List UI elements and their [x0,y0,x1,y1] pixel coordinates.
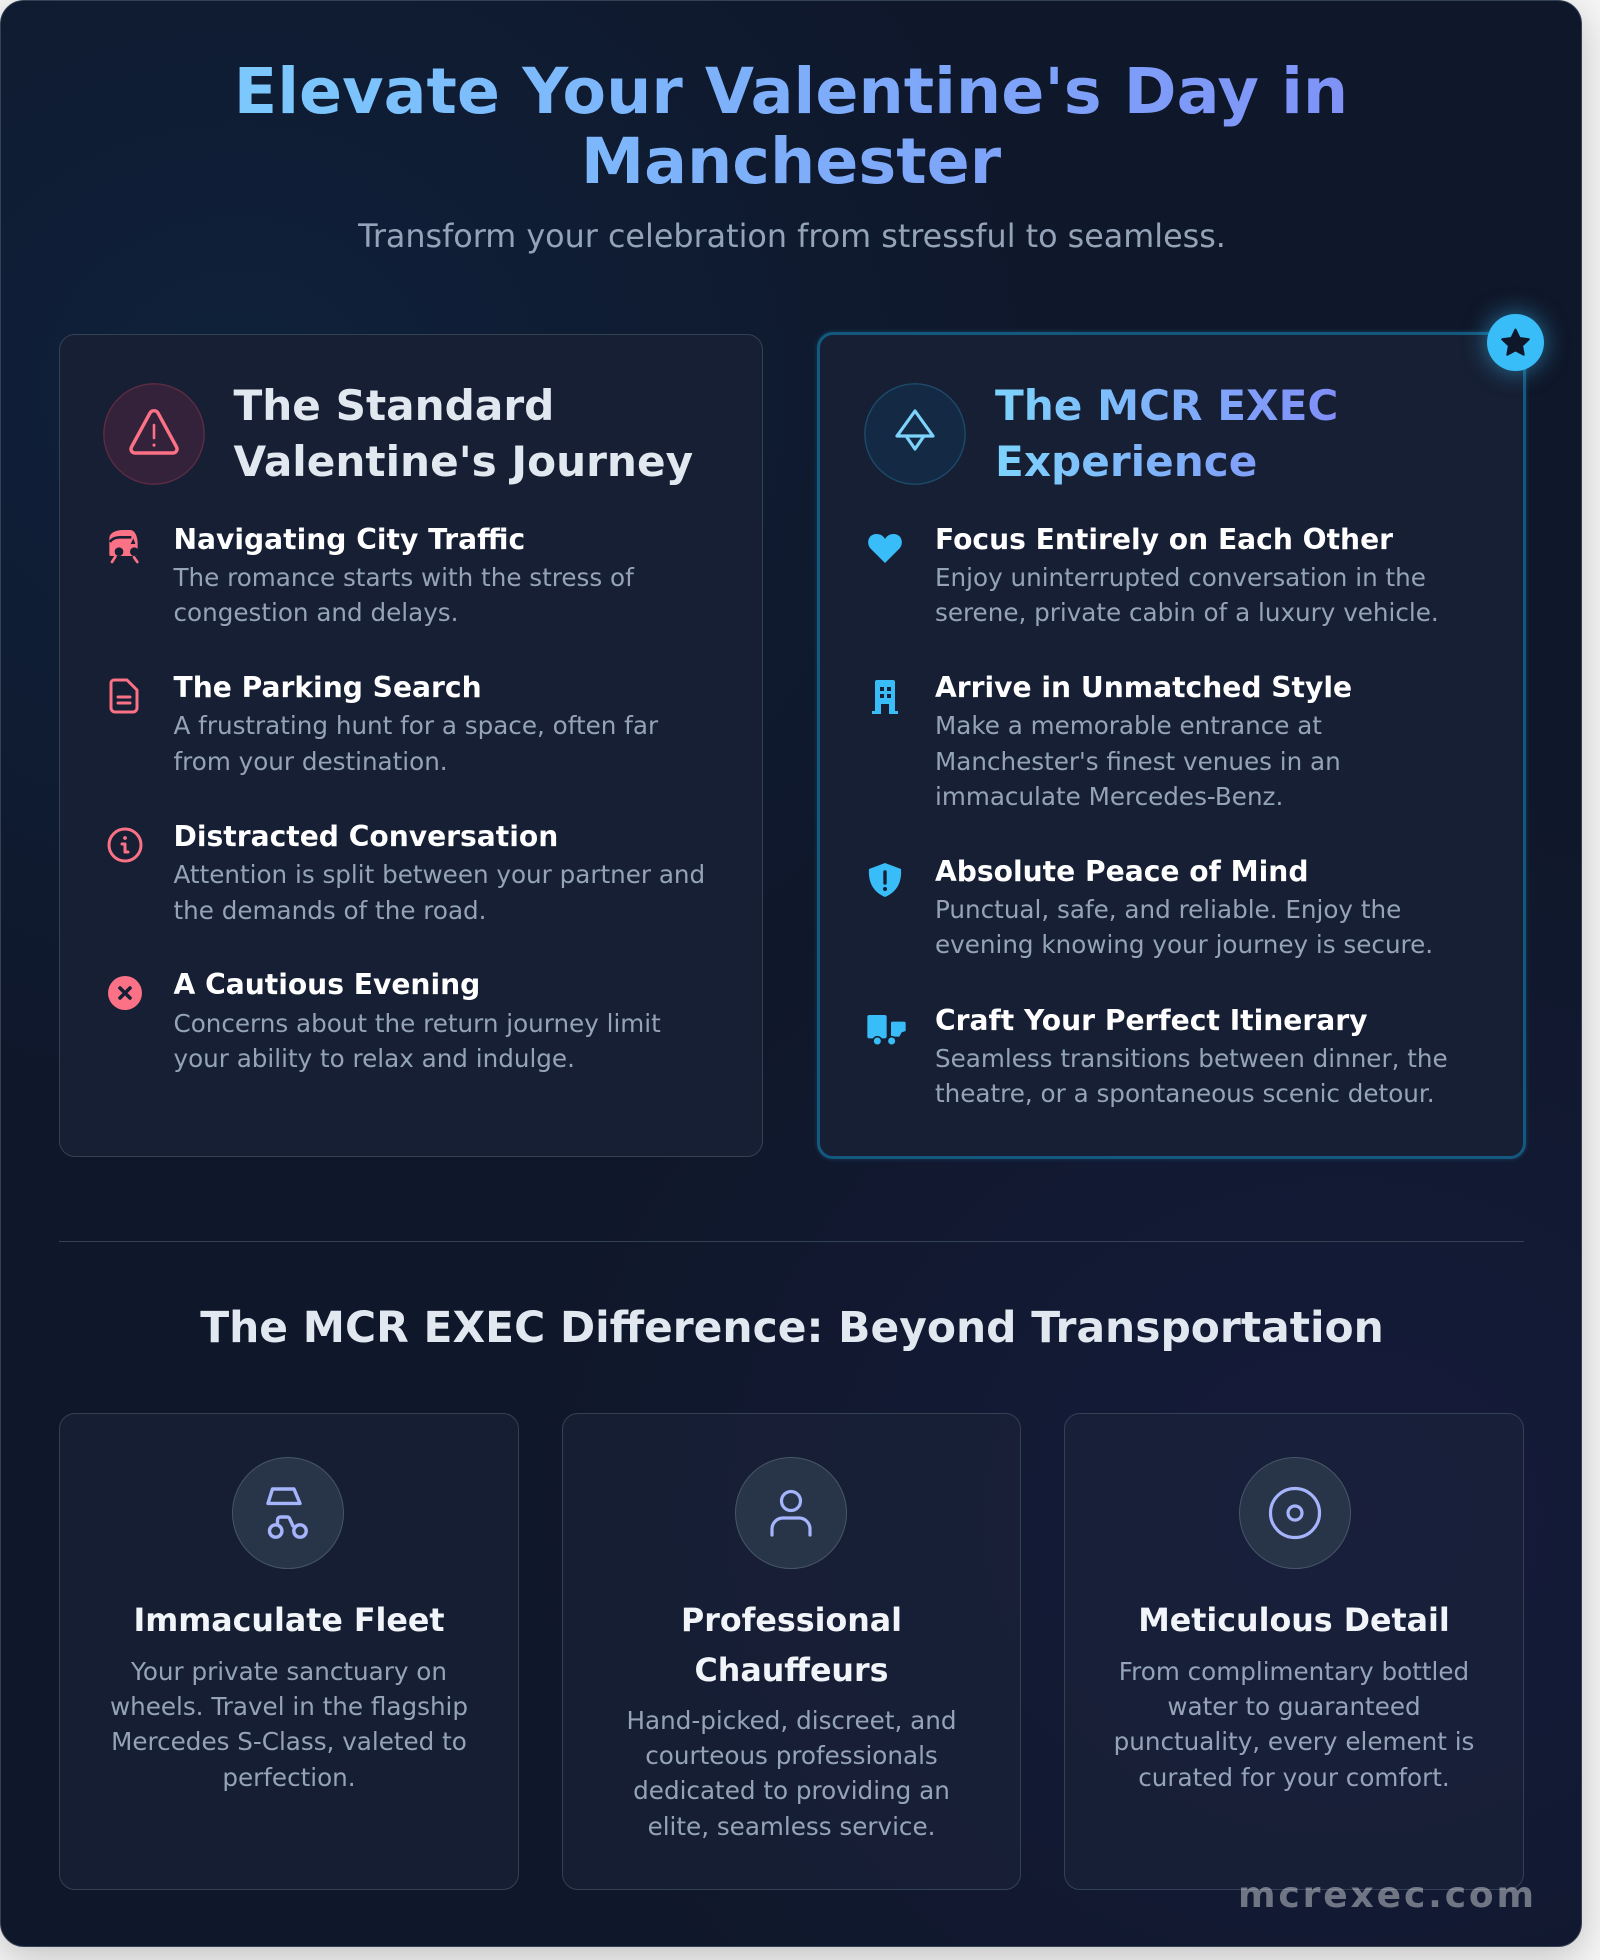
icon: info [108,828,142,862]
icon: building [872,680,898,714]
title [226,56,1356,196]
panel heading: MCR EXEC experience: Experience [995,437,1257,486]
infographic card: The romance starts with the stress of [174,562,634,592]
infographic card: immaculate Mercedes-Benz. [935,782,1283,811]
divider [59,1241,1524,1242]
infographic card: the demands of the road. [174,896,486,925]
icon: diamond [864,383,966,485]
card text: courteous professionals [645,1741,938,1770]
infographic card: Craft Your Perfect Itinerary [935,1004,1367,1037]
item: craft your perfect itinerary [935,1004,1448,1108]
card text [1114,1657,1474,1792]
item: distracted conversation [174,820,705,925]
infographic card: serene, private cabin of a luxury vehicle. [935,598,1439,627]
icon: document [110,678,138,714]
infographic card: Seamless transitions between dinner, the [935,1044,1448,1072]
icon: shield [868,863,902,897]
icon: cross circle [108,976,142,1010]
card text: dedicated to providing an [633,1776,950,1805]
infographic card: evening knowing your journey is secure. [935,930,1433,959]
subtitle: Transform your celebration from stressful to seamless. [358,218,1226,255]
icon: heart [868,534,902,563]
card text: elite, seamless service. [648,1812,935,1841]
panel heading: MCR EXEC experience: The MCR EXEC [995,380,1338,430]
card text: Your private sanctuary on [131,1657,447,1686]
icon: target [1239,1457,1351,1569]
icon: truck [867,1015,906,1044]
item: arrive in unmatched style [935,671,1352,811]
card title: Meticulous Detail [1138,1603,1450,1639]
infographic card: congestion and delays. [174,598,458,627]
card text: wheels. Travel in the flagship [110,1692,468,1721]
card: immaculate fleet [59,1413,519,1890]
icon: star badge [1473,300,1558,385]
card text: punctuality, every element is [1114,1727,1474,1756]
infographic card: Distracted Conversation [174,820,558,852]
card text [110,1657,468,1792]
item: navigating city traffic [173,523,634,627]
infographic card: Concerns about the return journey limit [174,1008,661,1038]
item: a cautious evening [174,968,661,1073]
card title: Chauffeurs [695,1653,888,1689]
item: focus entirely on each other [935,523,1439,627]
panel heading: standard journey: The Standard [234,380,554,430]
infographic card: your ability to relax and indulge. [174,1044,575,1073]
infographic card: Navigating City Traffic [174,523,525,556]
infographic card: theatre, or a spontaneous scenic detour. [935,1079,1435,1108]
infographic card: Make a memorable entrance at [935,711,1322,740]
panel: MCR EXEC experience [817,332,1526,1159]
card title: Immaculate Fleet [133,1603,445,1639]
title: Manchester [581,124,1001,198]
infographic card: Arrive in Unmatched Style [935,671,1352,704]
card text: perfection. [222,1763,356,1792]
panel heading: MCR EXEC experience [995,378,1345,491]
infographic card: Punctual, safe, and reliable. Enjoy the [935,894,1401,924]
infographic card: Focus Entirely on Each Other [935,523,1393,556]
card text: From complimentary bottled [1119,1657,1469,1686]
icon: fleet [232,1457,344,1569]
card text: Hand-picked, discreet, and [627,1706,956,1735]
item: absolute peace of mind [935,855,1433,959]
card title: Professional [681,1603,902,1639]
card title [681,1603,902,1689]
infographic card: from your destination. [174,747,448,776]
watermark: mcrexec.com [1238,1875,1537,1916]
card text [627,1706,956,1841]
icon: car [109,530,139,564]
infographic card: The Parking Search [174,671,482,704]
item: the parking search [174,671,658,776]
title: Elevate Your Valentine's Day in [234,54,1348,128]
card text: water to guaranteed [1167,1692,1421,1721]
card: meticulous detail [1064,1413,1524,1890]
infographic card: A frustrating hunt for a space, often far [174,711,658,740]
infographic card: Enjoy uninterrupted conversation in the [935,562,1426,592]
card: professional chauffeurs [562,1413,1021,1890]
icon: warning triangle [103,383,205,485]
card text: Mercedes S-Class, valeted to [111,1727,467,1756]
infographic card: Absolute Peace of Mind [935,855,1308,888]
infographic card: A Cautious Evening [174,968,480,1001]
infographic card: Manchester's finest venues in an [935,747,1341,776]
infographic card: Attention is split between your partner and [174,860,705,889]
panel heading: standard journey [234,380,693,486]
card text: curated for your comfort. [1138,1763,1450,1792]
section heading: The MCR EXEC Difference: Beyond Transportation [200,1303,1384,1352]
panel heading: standard journey: Valentine's Journey [234,437,693,486]
icon: person [734,1457,846,1569]
panel: standard journey [59,334,763,1157]
